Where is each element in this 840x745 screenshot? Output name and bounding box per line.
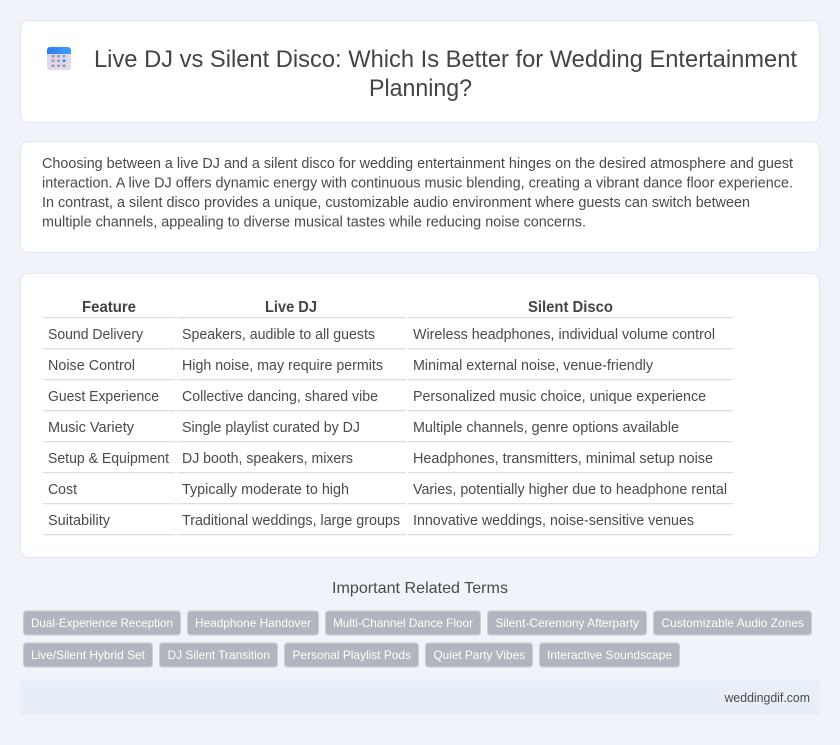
tag [24,611,180,635]
row: setup and equipment: Headphones, transmitters, minimal setup noise [413,451,713,467]
tag: Dual-Experience Reception [31,616,173,630]
table header: Live DJ [265,299,317,316]
title [94,46,797,102]
row: music variety [48,420,679,436]
panel: introduction text: interaction. A live DJ offers dynamic energy with continuous music blending, creating a vibrant dance floor experience. [42,176,793,192]
tag [654,611,812,635]
tag [326,611,480,635]
row: sound delivery: Speakers, audible to all guests [182,327,375,343]
title: Planning? [369,75,472,102]
tag: Live/Silent Hybrid Set [31,648,146,662]
panel: introduction text: In contrast, a silent disco provides a unique, customizable audio environment where guests can switch between [42,195,750,211]
panel: introduction text [20,142,820,252]
row: cost: Varies, potentially higher due to headphone rental [413,482,727,498]
tag [488,611,646,635]
icon: calendar [47,47,71,70]
tag: DJ Silent Transition [168,648,270,662]
row: sound delivery: Sound Delivery [48,327,144,343]
heading: related terms: Important Related Terms [332,580,508,597]
row: noise control: High noise, may require permits [182,358,383,374]
tag: Customizable Audio Zones [662,616,804,630]
row: guest experience [48,389,706,405]
tag: Interactive Soundscape [547,648,672,662]
panel: introduction text: Choosing between a live DJ and a silent disco for wedding entertainment hinges on the desired atmosphere and guest [42,156,793,172]
row: guest experience: Guest Experience [48,389,159,405]
row: cost: Cost [48,482,77,498]
row: noise control: Minimal external noise, venue-friendly [413,358,654,374]
related term tags [24,611,812,667]
row: setup and equipment [48,451,713,467]
row: suitability: Suitability [48,513,111,529]
row: noise control [48,358,654,374]
panel: comparison table [20,274,820,558]
tag [284,643,418,667]
row: setup and equipment: Setup & Equipment [48,451,169,467]
tag: Personal Playlist Pods [292,648,411,662]
tag [24,643,152,667]
tag [160,643,278,667]
panel: title card [20,20,820,122]
footer bar: weddingdif.com [724,690,810,705]
row: cost: Typically moderate to high [182,482,349,498]
tag: Silent-Ceremony Afterparty [496,616,639,630]
row: music variety: Multiple channels, genre options available [413,420,679,436]
row: guest experience: Collective dancing, shared vibe [182,389,378,405]
table header [82,299,613,316]
table header: Feature [82,299,136,316]
row: suitability [48,513,694,529]
row: noise control: Noise Control [48,358,135,374]
row: cost [48,482,727,498]
row: suitability: Innovative weddings, noise-sensitive venues [413,513,694,529]
tag: Multi-Channel Dance Floor [333,616,473,630]
tag [188,611,318,635]
title: Live DJ vs Silent Disco: Which Is Better for Wedding Entertainment [94,46,797,73]
tag: Quiet Party Vibes [434,648,525,662]
row: sound delivery [48,327,715,343]
row: guest experience: Personalized music choice, unique experience [413,389,706,405]
panel: introduction text: multiple channels, appealing to diverse musical tastes while reducing noise concerns. [42,214,586,230]
footer bar [20,681,820,715]
row: music variety: Single playlist curated by DJ [182,420,360,436]
row: sound delivery: Wireless headphones, individual volume control [413,327,715,343]
row: music variety: Music Variety [48,420,135,436]
row: setup and equipment: DJ booth, speakers, mixers [182,451,353,467]
row: suitability: Traditional weddings, large groups [182,513,400,529]
tag [426,643,532,667]
tag: Headphone Handover [195,616,311,630]
table header: Silent Disco [528,299,613,316]
tag [540,643,680,667]
